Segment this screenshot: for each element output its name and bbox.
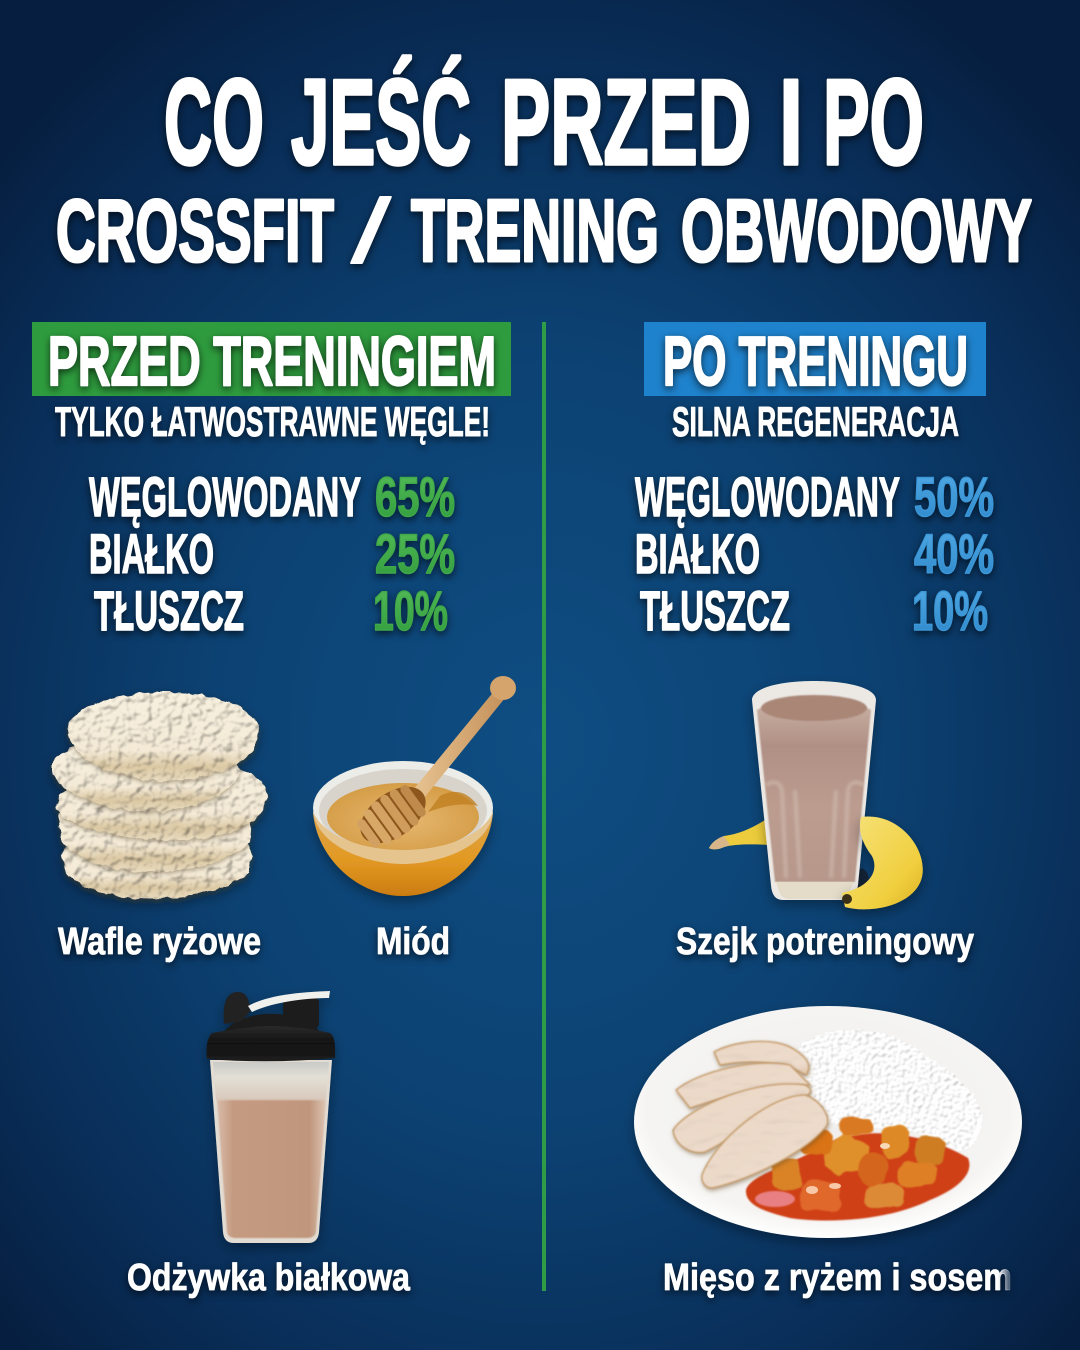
icon: shake glass with banana <box>709 681 923 909</box>
dipper <box>350 676 516 855</box>
title: I <box>779 54 803 190</box>
label: odżywka białkowa: Odżywka białkowa <box>127 1257 411 1299</box>
icon: rice cakes <box>52 692 268 899</box>
macro list: BIAŁKO <box>635 522 760 585</box>
icon: protein shaker <box>207 991 335 1243</box>
macro list: WĘGLOWODANY <box>89 465 361 528</box>
macro list: 25% <box>375 522 455 585</box>
label: wafle ryżowe: Wafle ryżowe <box>58 921 261 963</box>
panel: after training <box>634 322 1022 1299</box>
divider between columns <box>542 322 546 1291</box>
macro list: 50% <box>914 465 994 528</box>
icon: plate with chicken, rice and sauce <box>634 1006 1022 1238</box>
icon: honey bowl with dipper <box>313 676 516 896</box>
title: TRENING <box>411 181 659 280</box>
macro list: 10% <box>912 579 988 642</box>
label: szejk potreningowy: Szejk potreningowy <box>676 921 974 963</box>
title: JEŚĆ <box>291 54 471 190</box>
macro list: 10% <box>373 579 448 642</box>
label: miód: Miód <box>376 921 450 963</box>
title: CROSSFIT <box>56 181 334 280</box>
title: PO <box>823 54 924 190</box>
sauce <box>746 1118 969 1221</box>
title: PRZED <box>501 54 751 190</box>
title: CO <box>164 54 264 190</box>
macro list: TŁUSZCZ <box>94 579 244 642</box>
heading: przed treningiem: PRZED TRENINGIEM <box>48 322 496 400</box>
macro list <box>89 465 455 642</box>
label: mięso z ryżem i sosem: Mięso z ryżem i sosem <box>663 1257 1012 1299</box>
macro list: 40% <box>914 522 994 585</box>
macro list <box>635 465 994 642</box>
panel: before training <box>32 322 516 1299</box>
macro list: TŁUSZCZ <box>640 579 790 642</box>
title <box>56 54 1032 280</box>
heading: przed treningiem <box>32 322 511 400</box>
macro list: BIAŁKO <box>89 522 214 585</box>
title: / <box>346 181 395 280</box>
macro list: 65% <box>375 465 455 528</box>
subheading: TYLKO ŁATWOSTRAWNE WĘGLE! <box>55 398 490 445</box>
chicken slices <box>673 1041 828 1188</box>
